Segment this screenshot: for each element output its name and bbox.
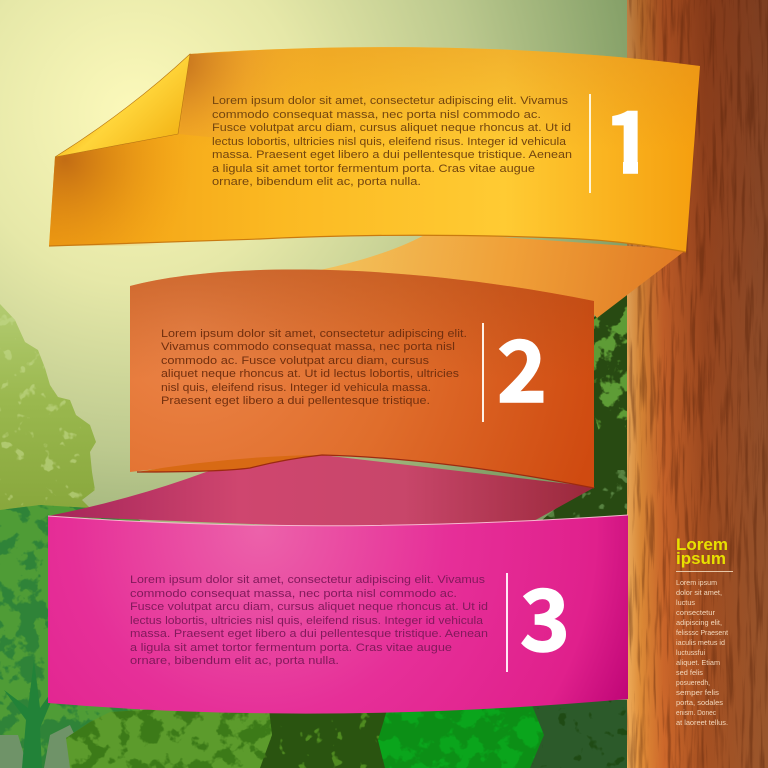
sidebar text: aliquet. Etiam	[676, 658, 720, 667]
panel 3 top highlight	[48, 515, 628, 526]
sidebar text: felisssc Praesent	[676, 628, 728, 637]
panel 1 curled corner	[55, 54, 190, 157]
panel 2 bottom fold	[137, 455, 322, 472]
sidebar text: luctussfui	[676, 648, 705, 657]
panel 1 text: Lorem ipsum dolor sit amet, consectetur adipiscing elit. Vivamus	[212, 95, 568, 107]
panel 1 divider	[589, 94, 591, 193]
panel 3 divider	[506, 573, 508, 672]
orange fold connecting panels 1 and 2	[320, 232, 686, 318]
panel 2 text: Vivamus commodo consequat massa, nec porta nisl	[161, 341, 455, 353]
panel 1 text: ornare, bibendum elit ac, porta nulla.	[212, 176, 421, 188]
number 2: 2	[497, 304, 547, 427]
panel 2 top shading	[130, 270, 594, 380]
panel 3 text: Fusce volutpat arcu diam, cursus aliquet neque rhoncus at. Ut id	[130, 601, 488, 613]
panel 2 text	[161, 328, 467, 407]
panel 3 text: massa. Praesent eget libero a dui pellentesque tristique. Aenean	[130, 628, 488, 640]
panel 2 text: nisl quis, eleifend risus. Integer id vehicula massa.	[161, 382, 431, 394]
panel 3 text: Lorem ipsum dolor sit amet, consectetur adipiscing elit. Vivamus	[130, 574, 485, 586]
sidebar on trunk	[676, 535, 733, 727]
panel 3 sheet	[48, 515, 628, 714]
panel 2 bottom edge	[137, 455, 594, 488]
sidebar heading: ipsum	[676, 549, 726, 568]
panel 2 text: aliquet neque rhoncus at. Ut id lectus lobortis, ultricies	[161, 368, 459, 380]
sidebar text: iaculis metus id	[676, 638, 725, 647]
panel 1 lower shading	[49, 134, 230, 246]
panel 1 sheet	[49, 47, 700, 252]
panel 2 text: Lorem ipsum dolor sit amet, consectetur adipiscing elit.	[161, 328, 467, 340]
panel 3: pink note	[48, 515, 628, 714]
panel 3 text: lectus lobortis, ultricies nisl quis, eleifend risus. Integer id vehicula	[130, 615, 484, 627]
panel 3 text: commodo consequat massa, nec porta nisl commodo ac.	[130, 588, 457, 600]
magenta fold connecting panels 2 and 3	[48, 455, 595, 527]
panel 1 text	[212, 95, 572, 188]
panel 2 divider	[482, 323, 484, 422]
sidebar text: porta, sodales	[676, 698, 723, 707]
panel 1 top-left shading	[178, 47, 340, 150]
panel 1 text: a ligula sit amet tortor fermentum porta. Cras vitae augue	[212, 163, 535, 175]
number 1: 1	[604, 75, 654, 198]
foliage: dark tree behind panels on the right	[530, 292, 628, 530]
panel 1 text: commodo consequat massa, nec porta nisl commodo ac.	[212, 109, 541, 121]
foliage: bottom trees	[66, 700, 630, 768]
sidebar text	[676, 578, 728, 727]
foliage: pale tree on the left	[0, 304, 96, 510]
panel 1 bottom edge	[49, 235, 686, 252]
sidebar text: at laoreet tellus.	[676, 718, 728, 727]
sidebar text: enism. Donec	[676, 708, 716, 717]
panel 3 text: a ligula sit amet tortor fermentum porta. Cras vitae augue	[130, 642, 452, 654]
panel 2: orange note	[130, 270, 594, 488]
sidebar heading: Lorem	[676, 535, 728, 554]
panel 2 text: commodo ac. Fusce volutpat arcu diam, cursus	[161, 355, 429, 367]
panel 2 sheet	[130, 270, 594, 488]
panel 1 top band shading	[178, 47, 700, 150]
sidebar text: adipiscing elit,	[676, 618, 722, 627]
sidebar rule	[676, 571, 733, 572]
sidebar text: luctus	[676, 598, 695, 607]
tree trunk	[627, 0, 768, 768]
panel 2 text: Praesent eget libero a dui pellentesque tristique.	[161, 395, 430, 407]
sidebar text: dolor sit amet,	[676, 588, 722, 597]
sidebar text: sed felis	[676, 668, 703, 677]
sidebar heading	[676, 535, 728, 568]
panel 3 text: ornare, bibendum elit ac, porta nulla.	[130, 655, 339, 667]
sidebar text: posueredh,	[676, 678, 710, 687]
panel 1 text: Fusce volutpat arcu diam, cursus aliquet neque rhoncus at. Ut id	[212, 122, 571, 134]
panel 3 text	[130, 574, 488, 667]
sidebar text: Lorem ipsum	[676, 578, 717, 587]
panel 1 text: lectus lobortis, ultricies nisl quis, eleifend risus. Integer id vehicula	[212, 136, 567, 148]
foliage: green tree lower left	[0, 505, 140, 768]
sidebar text: semper felis	[676, 688, 719, 697]
panel 1 text: massa. Praesent eget libero a dui pellentesque tristique. Aenean	[212, 149, 572, 161]
panel 1: yellow note	[49, 47, 700, 252]
number 3: 3	[520, 553, 570, 676]
sidebar text: consectetur	[676, 608, 716, 617]
